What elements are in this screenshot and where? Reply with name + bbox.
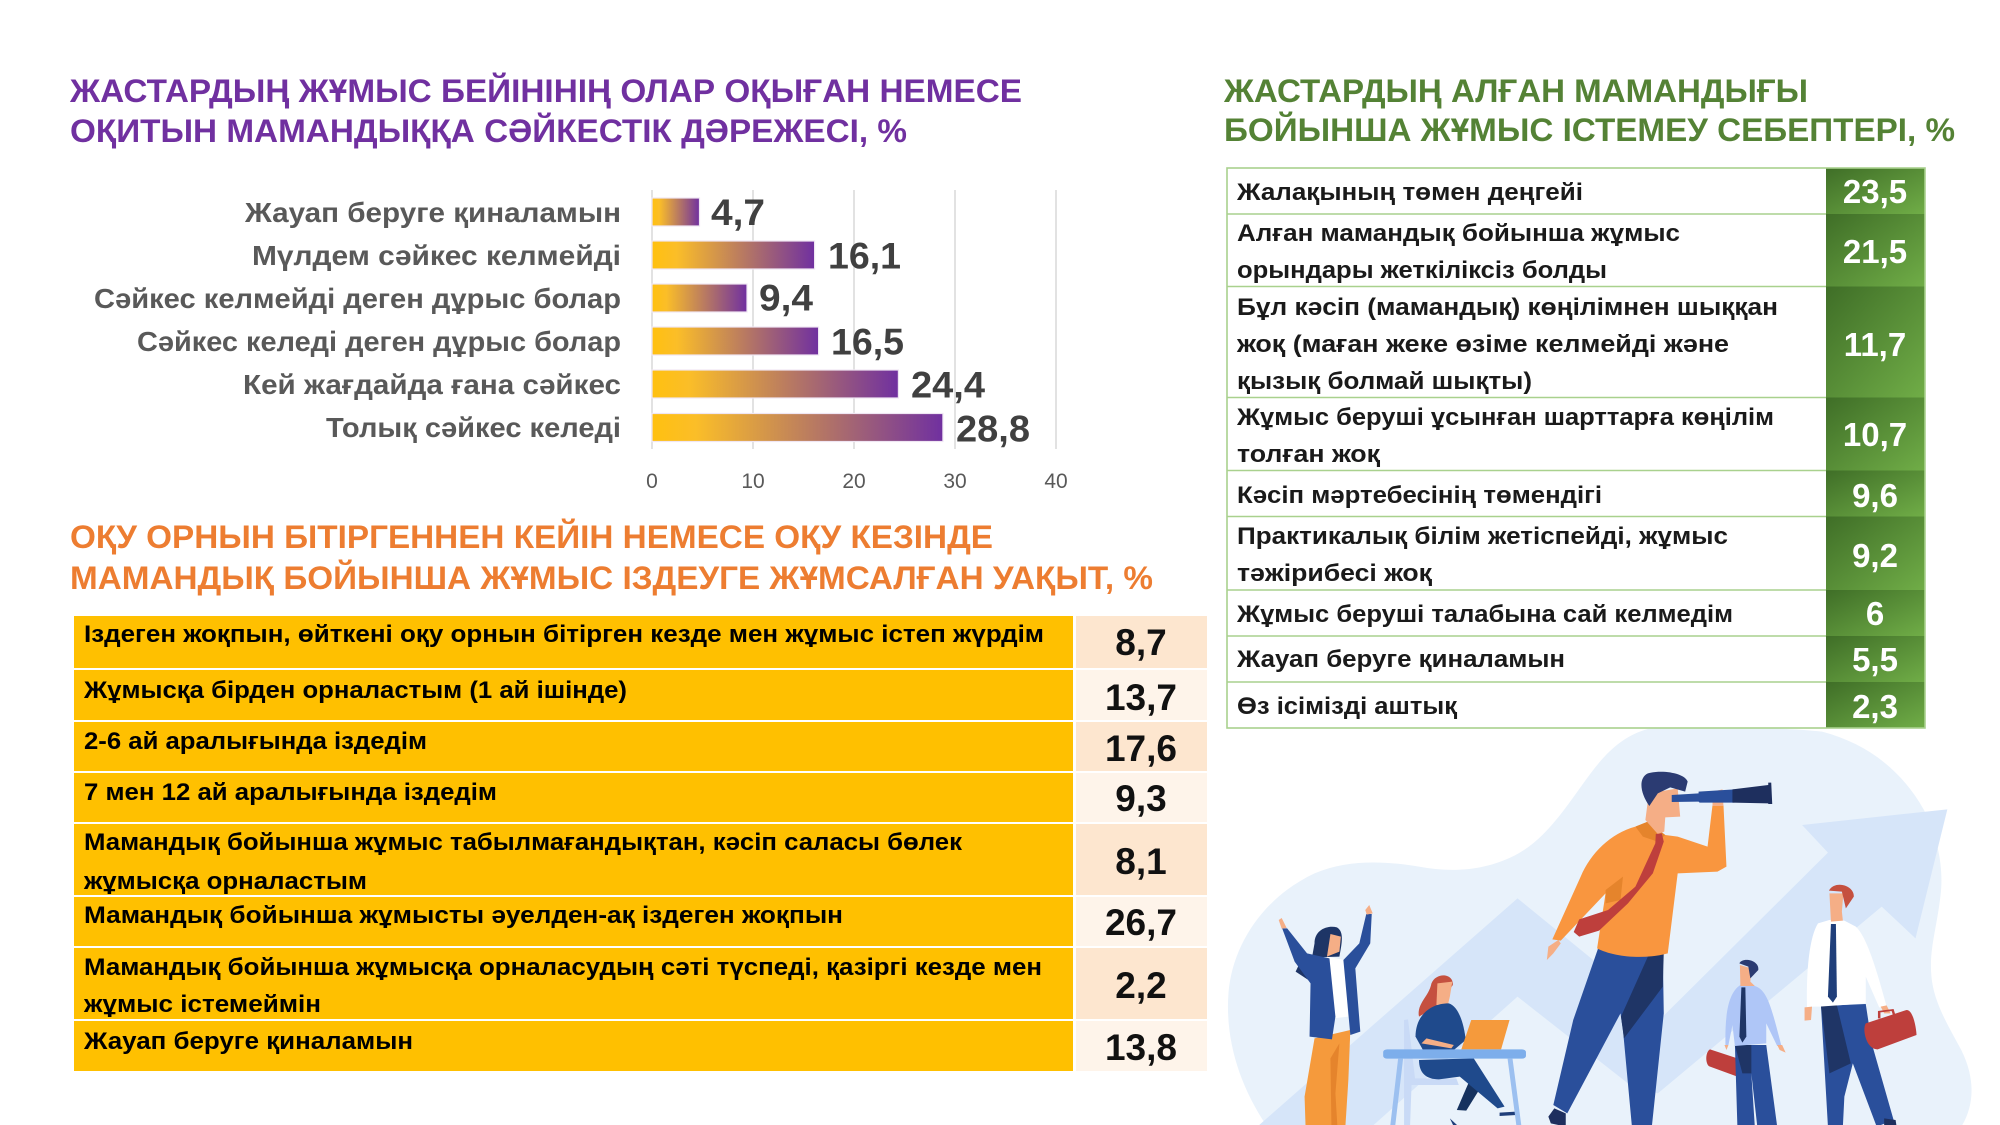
reason labels: қызық болмай шықты) (1237, 368, 1532, 395)
value labels: 16,1 (828, 236, 901, 276)
value labels (711, 192, 1030, 450)
value cells (1826, 168, 1925, 728)
row 4: 9,3 (1115, 778, 1167, 819)
title: job match heading (69, 71, 1022, 149)
row 7 (74, 948, 1207, 1019)
category labels: Кей жағдайда ғана сәйкес (243, 369, 621, 400)
reason labels: Жауап беруге қиналамын (1236, 646, 1565, 673)
reason labels: Жалақының төмен деңгейі (1236, 179, 1583, 206)
reason values: 21,5 (1843, 233, 1907, 270)
bars (652, 198, 943, 442)
reason labels: Кәсіп мәртебесінің төмендігі (1237, 482, 1602, 509)
category labels: Жауап беруге қиналамын (244, 197, 621, 228)
row 7: 2,2 (1115, 965, 1167, 1006)
category labels (94, 197, 621, 443)
reason values: 5,5 (1852, 641, 1898, 678)
row 3: 2-6 ай аралығында іздедім (84, 728, 427, 755)
reason labels: Практикалық білім жетіспейді, жұмыс (1237, 523, 1728, 550)
title: job search time heading (70, 517, 1153, 596)
row 2 (74, 670, 1207, 720)
reason values: 6 (1866, 595, 1884, 632)
growth arrow (1257, 809, 1947, 1125)
illustration: team with spyglass (1228, 727, 1972, 1125)
table: job search time (74, 616, 1207, 1071)
title: job search time heading: МАМАНДЫҚ БОЙЫНША ЖҰМЫС ІЗДЕУГЕ ЖҰМСАЛҒАН УАҚЫТ, % (70, 558, 1153, 596)
tall man with red briefcase (1805, 885, 1916, 1125)
row 1 (74, 616, 1207, 668)
row 2: 13,7 (1105, 677, 1177, 718)
reason values: 11,7 (1844, 326, 1906, 363)
reason values: 9,6 (1852, 477, 1898, 514)
row 5 (74, 824, 1207, 895)
reason values: 10,7 (1843, 416, 1907, 453)
reason labels: Бұл кәсіп (мамандық) көңілімнен шыққан (1237, 294, 1778, 321)
reason labels: Жұмыс беруші ұсынған шарттарға көңілім (1236, 404, 1774, 431)
reason labels: Алған мамандық бойынша жұмыс (1237, 220, 1680, 247)
row 3: 17,6 (1105, 728, 1177, 769)
row 5: 8,1 (1115, 841, 1167, 882)
woman at laptop (1383, 975, 1526, 1125)
row 7: жұмыс істемеймін (83, 991, 321, 1018)
category labels: Мүлдем сәйкес келмейді (252, 240, 621, 271)
reason labels: толған жоқ (1237, 441, 1381, 468)
small man with briefcase (1706, 960, 1786, 1125)
row 5: жұмысқа орналастым (83, 868, 367, 895)
category labels: Толық сәйкес келеді (326, 412, 621, 443)
row 3 (74, 722, 1207, 771)
row 8: 13,8 (1105, 1027, 1177, 1068)
row 1: Іздеген жоқпын, өйткені оқу орнын бітірген кезде мен жұмыс істеп жүрдім (84, 621, 1044, 648)
title: job search time heading: ОҚУ ОРНЫН БІТІРГЕННЕН КЕЙІН НЕМЕСЕ ОҚУ КЕЗІНДЕ (70, 517, 993, 555)
blob background (1228, 727, 1972, 1125)
reason labels: Өз ісімізді аштық (1237, 693, 1458, 720)
reason labels: Жұмыс беруші талабына сай келмедім (1236, 601, 1733, 628)
title: job match heading: ЖАСТАРДЫҢ ЖҰМЫС БЕЙІНІНІҢ ОЛАР ОҚЫҒАН НЕМЕСЕ (69, 71, 1022, 109)
category labels: Сәйкес келеді деген дұрыс болар (137, 326, 621, 357)
value labels: 4,7 (711, 192, 765, 233)
row 7: Мамандық бойынша жұмысқа орналасудың сәті түспеді, қазіргі кезде мен (84, 954, 1042, 981)
row 4 (74, 773, 1207, 822)
category labels: Сәйкес келмейді деген дұрыс болар (94, 283, 621, 314)
row 5: Мамандық бойынша жұмыс табылмағандықтан, кәсіп саласы бөлек (84, 829, 963, 856)
axis labels (646, 470, 1068, 493)
reason labels: орындары жеткіліксіз болды (1237, 257, 1607, 284)
axis labels: 0 (646, 470, 658, 493)
value labels: 28,8 (956, 408, 1030, 450)
axis labels: 20 (842, 470, 866, 493)
row 1: 8,7 (1115, 622, 1167, 663)
title: reasons heading: БОЙЫНША ЖҰМЫС ІСТЕМЕУ СЕБЕПТЕРІ, % (1224, 110, 1955, 148)
reason labels: тәжірибесі жоқ (1237, 560, 1433, 587)
reason values: 9,2 (1852, 537, 1898, 574)
main man with spyglass (1547, 772, 1772, 1125)
reason labels (1236, 179, 1778, 720)
woman cheering (1279, 905, 1373, 1125)
value labels: 9,4 (759, 278, 813, 318)
title: reasons heading: ЖАСТАРДЫҢ АЛҒАН МАМАНДЫҒЫ (1223, 73, 1808, 109)
reason values: 2,3 (1852, 688, 1898, 725)
title: reasons heading (1223, 73, 1955, 148)
row 4: 7 мен 12 ай аралығында іздедім (84, 779, 497, 806)
value labels: 24,4 (911, 364, 985, 406)
reason labels: жоқ (маған жеке өзіме келмейді және (1236, 331, 1729, 358)
row 6: Мамандық бойынша жұмысты әуелден-ақ іздеген жоқпын (84, 902, 843, 929)
reason values (1843, 173, 1907, 725)
row 2: Жұмысқа бірден орналастым (1 ай ішінде) (83, 677, 627, 704)
row 8: Жауап беруге қиналамын (83, 1028, 413, 1055)
row 6: 26,7 (1105, 902, 1177, 943)
title: job match heading: ОҚИТЫН МАМАНДЫҚҚА СӘЙКЕСТІК ДӘРЕЖЕСІ, % (70, 111, 907, 149)
row 8 (74, 1021, 1207, 1071)
axis labels: 10 (741, 470, 765, 493)
row 6 (74, 897, 1207, 946)
reason values: 23,5 (1843, 173, 1907, 210)
borders (1227, 168, 1925, 728)
axis labels: 30 (943, 470, 967, 493)
bar chart: job match (94, 190, 1068, 493)
value labels: 16,5 (831, 322, 904, 362)
table: reasons for not working in profession (1227, 168, 1925, 728)
axis labels: 40 (1044, 470, 1068, 493)
